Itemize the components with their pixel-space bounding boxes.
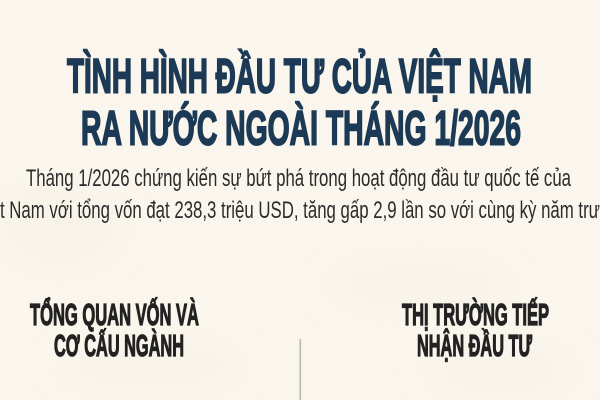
title: [67, 48, 532, 156]
heading: receiving markets: [402, 296, 549, 363]
heading: capital overview and sector structure: TỔNG QUAN VỐN VÀ: [30, 296, 199, 332]
heading: capital overview and sector structure: [30, 296, 199, 363]
intro text block: [0, 165, 600, 224]
heading: capital overview and sector structure: CƠ CẤU NGÀNH: [54, 328, 184, 363]
